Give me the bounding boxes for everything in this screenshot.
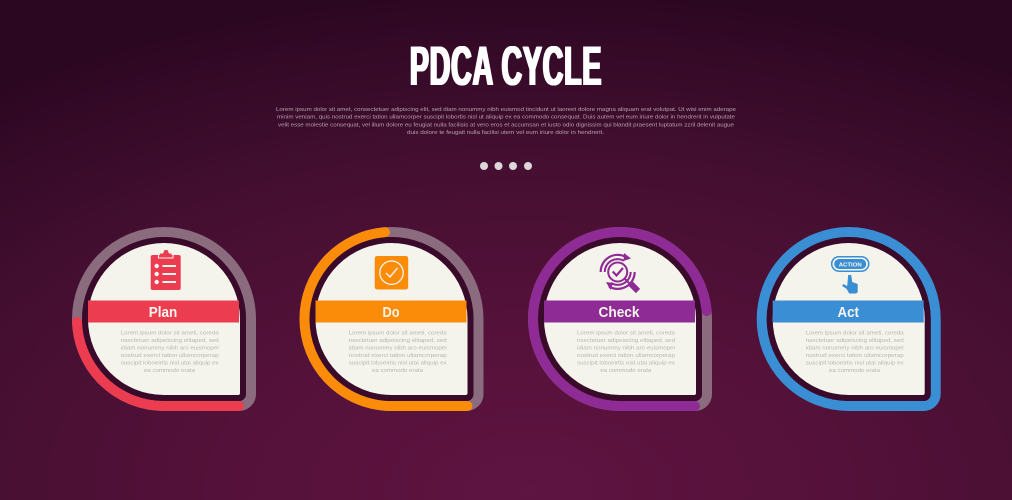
intro paragraph: minim veniam, quis nostrud exerci tation ullamcorper suscipit lobortis nisl ut aliquip ex ea commodo consequat. Duis autem vel eum iriure dolor in hendrerit in vulputate	[277, 115, 735, 121]
panel: Plan	[77, 232, 251, 406]
band: Do	[316, 300, 466, 322]
panel: Check	[533, 232, 707, 406]
body text: Act: nostrud exerci tation ullamcorperap	[806, 353, 904, 359]
icon: checkmark badge	[375, 256, 408, 290]
body text: Plan	[121, 331, 220, 374]
body text: Act: idiam nonummy nibh aro euismopei	[806, 346, 904, 352]
ring track: Check	[533, 232, 707, 406]
body text: Do: nsectetuer adipeiscing elitaped, sed	[349, 338, 447, 344]
body text: Do: Lorem ipsum dolor sit ameti, coreda	[349, 331, 448, 337]
title: PDCA CYCLE	[410, 34, 602, 97]
heading: Do: Do	[382, 305, 400, 321]
body text: Plan: suscipit loboeirtis nisl utai aliquip ex	[121, 361, 219, 367]
panel: Act	[762, 232, 936, 406]
body text: Plan: ea commodo erata	[144, 368, 196, 374]
icon: clipboard	[151, 250, 181, 290]
ring progress: Plan	[77, 322, 239, 406]
body text: Plan: idiam nonummy nibh aro euismopei	[121, 346, 219, 352]
body text: Check: Lorem ipsum dolor sit ameti, coreda	[577, 331, 676, 337]
body text: Act: suscipit loboeirtis nisl utai aliquip ex	[806, 361, 904, 367]
intro paragraph: velit esse molestie consequat, vel illum dolore eu feugiat nulla facilisis at vero eros et accumsan et iusto odio dignissim qui blandit praesent luptatum zzril delenit augue	[278, 122, 734, 128]
body text: Act: ea commodo erata	[829, 368, 881, 374]
band: Plan	[88, 300, 239, 322]
body text: Act	[806, 331, 905, 374]
pagination dots	[480, 162, 532, 170]
body text: Check: nostrud exerci tation ullamcorperap	[577, 353, 675, 359]
body text: Act: nsectetuer adipeiscing elitaped, sed	[806, 338, 904, 344]
heading: Act: Act	[837, 305, 859, 321]
heading: Check: Check	[598, 305, 640, 321]
intro paragraph: Lorem ipsum dolor sit amet, consectetuer adipiscing elit, sed diam nonummy nibh euismod tincidunt ut laoreet dolore magna aliquam erat volutpat. Ut wisi enim aderape	[276, 107, 736, 113]
ring progress: Do	[304, 232, 468, 406]
ring track: Plan	[77, 232, 251, 406]
heading: Plan: Plan	[149, 305, 177, 321]
body text: Check: idiam nonummy nibh aro euismopei	[577, 346, 675, 352]
body text: Plan: Lorem ipsum dolor sit ameti, coreda	[121, 331, 220, 337]
intro paragraph	[276, 107, 736, 136]
icon: action button with hand: ACTION	[839, 262, 862, 268]
icon: action button with hand	[832, 257, 869, 294]
body text: Plan: nostrud exerci tation ullamcorperap	[121, 353, 219, 359]
ring track: Do	[304, 232, 478, 406]
body text: Check: ea commodo erata	[600, 368, 652, 374]
body text: Act: Lorem ipsum dolor sit ameti, coreda	[806, 331, 905, 337]
body text: Check: suscipit loboeirtis nisl utai aliquip ex	[577, 361, 675, 367]
ring progress: Check	[533, 232, 707, 406]
body text: Do: suscipit loboeirtis nisl utai aliquip ex	[349, 361, 447, 367]
body text: Do: nostrud exerci tation ullamcorperap	[349, 353, 447, 359]
body text: Do: idiam nonummy nibh aro euismopei	[349, 346, 447, 352]
ring: Act	[762, 232, 936, 406]
band: Act	[773, 300, 924, 322]
intro paragraph: duis dolore te feugait nulla facilisi utem vel eum iriure dolor in hendrerit.	[407, 130, 604, 136]
body text: Plan: nsectetuer adipeiscing elitaped, sed	[121, 338, 219, 344]
body text: Check: nsectetuer adipeiscing elitaped, sed	[577, 338, 675, 344]
band: Check	[544, 300, 695, 322]
panel: Do	[304, 232, 478, 406]
body text: Check	[577, 331, 676, 374]
body text: Do	[349, 331, 448, 374]
body text: Do: ea commodo erata	[372, 368, 424, 374]
icon: magnifier with check	[601, 253, 638, 291]
